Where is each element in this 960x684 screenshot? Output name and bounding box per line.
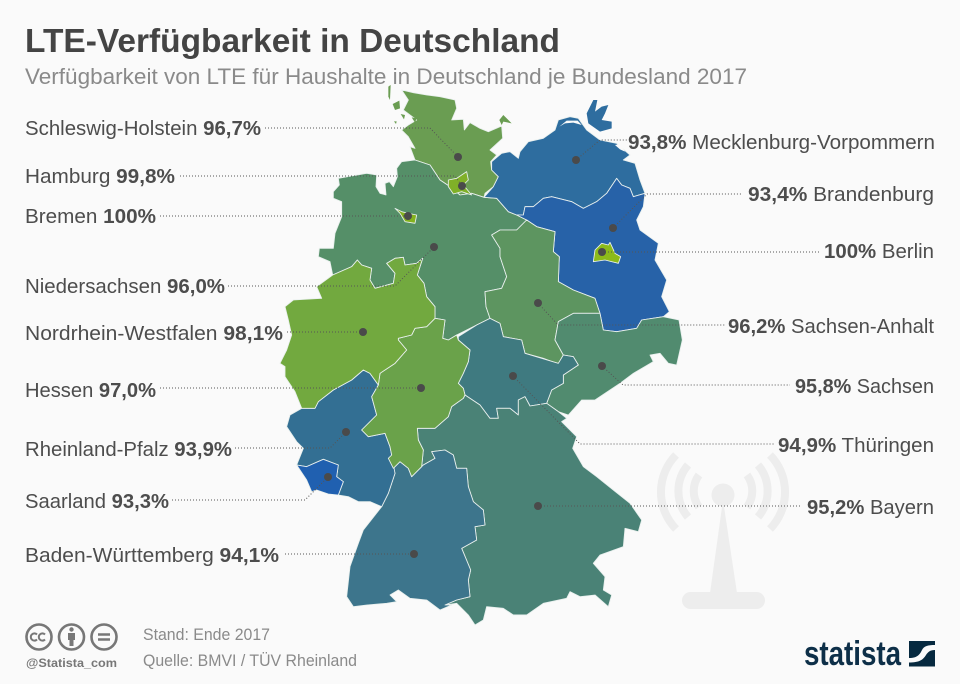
map region: Baden-Württemberg [347,450,485,610]
label: Sachsen: 95,8% Sachsen [795,375,934,398]
map region: Schleswig-Holstein [388,85,512,197]
map region: Hamburg [448,172,472,195]
map region: Mecklenburg-Vorpommern [484,100,645,215]
icon: antenna watermark [661,455,785,609]
map region: Saarland [297,459,343,495]
label: Hamburg: Hamburg 99,8% [25,165,175,188]
label: Sachsen-Anhalt: 96,2% Sachsen-Anhalt [728,315,934,338]
label: Thüringen: 94,9% Thüringen [778,434,934,457]
footer: status date: Stand: Ende 2017 [143,626,270,644]
leader lines [160,128,820,554]
label: Hessen: Hessen 97,0% [25,379,156,402]
map region: Niedersachsen [318,160,527,340]
map region: Berlin [593,242,621,263]
label: Bayern: 95,2% Bayern [807,496,934,519]
label: Saarland: Saarland 93,3% [25,490,169,513]
map region: Thüringen [458,318,578,418]
logo: statista: statista [804,635,902,673]
label: Niedersachsen: Niedersachsen 96,0% [25,275,225,298]
label: Rheinland-Pfalz: Rheinland-Pfalz 93,9% [25,438,232,461]
map region: Bayern [417,395,642,625]
map of Germany [280,85,682,625]
location dots [324,153,617,558]
map region: Hessen [362,318,470,477]
map region: Sachsen [547,313,682,415]
map region: Bremen [395,208,417,223]
footer: source: Quelle: BMVI / TÜV Rheinland [143,652,357,670]
label: Schleswig-Holstein: Schleswig-Holstein 96,7% [25,117,261,140]
label: Nordrhein-Westfalen: Nordrhein-Westfalen 98,1% [25,322,283,345]
label: Berlin: 100% Berlin [824,240,934,263]
map region: Nordrhein-Westfalen [280,257,435,408]
handle: @Statista_com [26,656,117,670]
label: Brandenburg: 93,4% Brandenburg [748,183,934,206]
subtitle: Verfügbarkeit von LTE für Haushalte in Deutschland je Bundesland 2017 [25,64,747,89]
map region: Rheinland-Pfalz [287,370,395,507]
label: Baden-Württemberg: Baden-Württemberg 94,1% [25,544,279,567]
label: Mecklenburg-Vorpommern: 93,8% Mecklenburg-Vorpommern [628,131,935,154]
map region: Brandenburg [517,178,669,332]
label: Bremen: Bremen 100% [25,205,156,228]
title: LTE-Verfügbarkeit in Deutschland [25,22,560,59]
icon: creative commons badges [26,624,116,650]
map region: Sachsen-Anhalt [485,220,600,364]
